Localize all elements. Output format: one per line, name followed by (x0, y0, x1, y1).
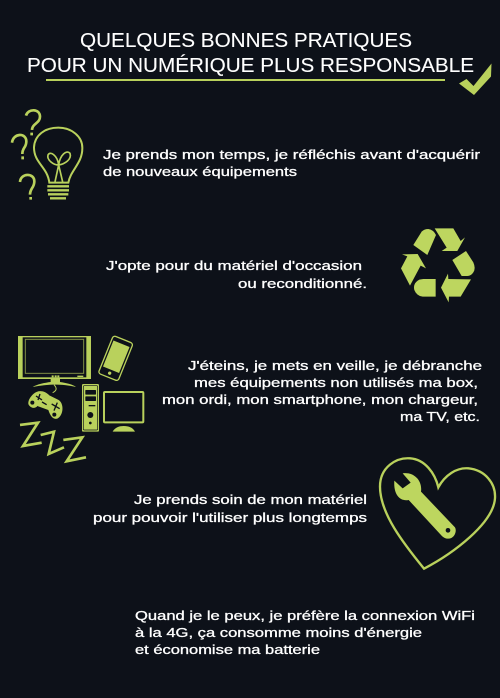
icon: recycling arrows (401, 228, 475, 302)
text block: step 5: et économise ma batterie (135, 642, 320, 657)
game controller (28, 385, 63, 419)
icon: light bulb with question marks (12, 110, 82, 200)
wrench (394, 473, 456, 539)
text block: step 3: mes équipements non utilisés ma box, (194, 375, 478, 390)
television (18, 336, 91, 387)
text block: step 3: mon ordi, mon smartphone, mon chargeur, (162, 392, 478, 407)
bulb outline (34, 128, 82, 183)
title: POUR UN NUMÉRIQUE PLUS RESPONSABLE (27, 54, 474, 77)
text block: step 2: ou reconditionné. (238, 276, 367, 291)
text block: step 2: J'opte pour du matériel d'occasion (106, 258, 362, 273)
question mark 1 (26, 110, 40, 135)
monitor (104, 392, 143, 432)
text block: step 4 (93, 492, 368, 525)
icon: heart with wrench (380, 458, 495, 569)
text block: step 4: pour pouvoir l'utiliser plus longtemps (93, 510, 368, 525)
text block: step 1: de nouveaux équipements (103, 164, 298, 179)
text block: step 2 (106, 258, 367, 291)
text block: step 5: Quand je le peux, je préfère la connexion WiFi (135, 608, 475, 623)
text block: step 1: Je prends mon temps, je réfléchis avant d'acquérir (103, 147, 481, 162)
sleeping letters (20, 423, 86, 461)
title (27, 30, 474, 77)
text block: step 4: Je prends soin de mon matériel (134, 492, 367, 507)
text block: step 3: ma TV, etc. (400, 409, 480, 424)
text block: step 1 (103, 147, 481, 179)
text block: step 5 (135, 608, 475, 657)
title underline (46, 79, 445, 81)
bulb base (47, 186, 69, 198)
computer tower (82, 384, 99, 432)
text block: step 3: J'éteins, je mets en veille, je débranche (188, 358, 482, 373)
text block: step 5: à la 4G, ça consomme moins d'énergie (135, 625, 422, 640)
icon: check mark (459, 64, 492, 95)
text block: step 3 (162, 358, 482, 424)
title: QUELQUES BONNES PRATIQUES (80, 30, 412, 52)
bulb sprout (48, 152, 70, 182)
question mark 3 (20, 175, 34, 200)
smartphone (98, 335, 133, 381)
icon: devices (18, 335, 143, 461)
question mark 2 (12, 135, 26, 159)
heart outline (380, 458, 495, 569)
